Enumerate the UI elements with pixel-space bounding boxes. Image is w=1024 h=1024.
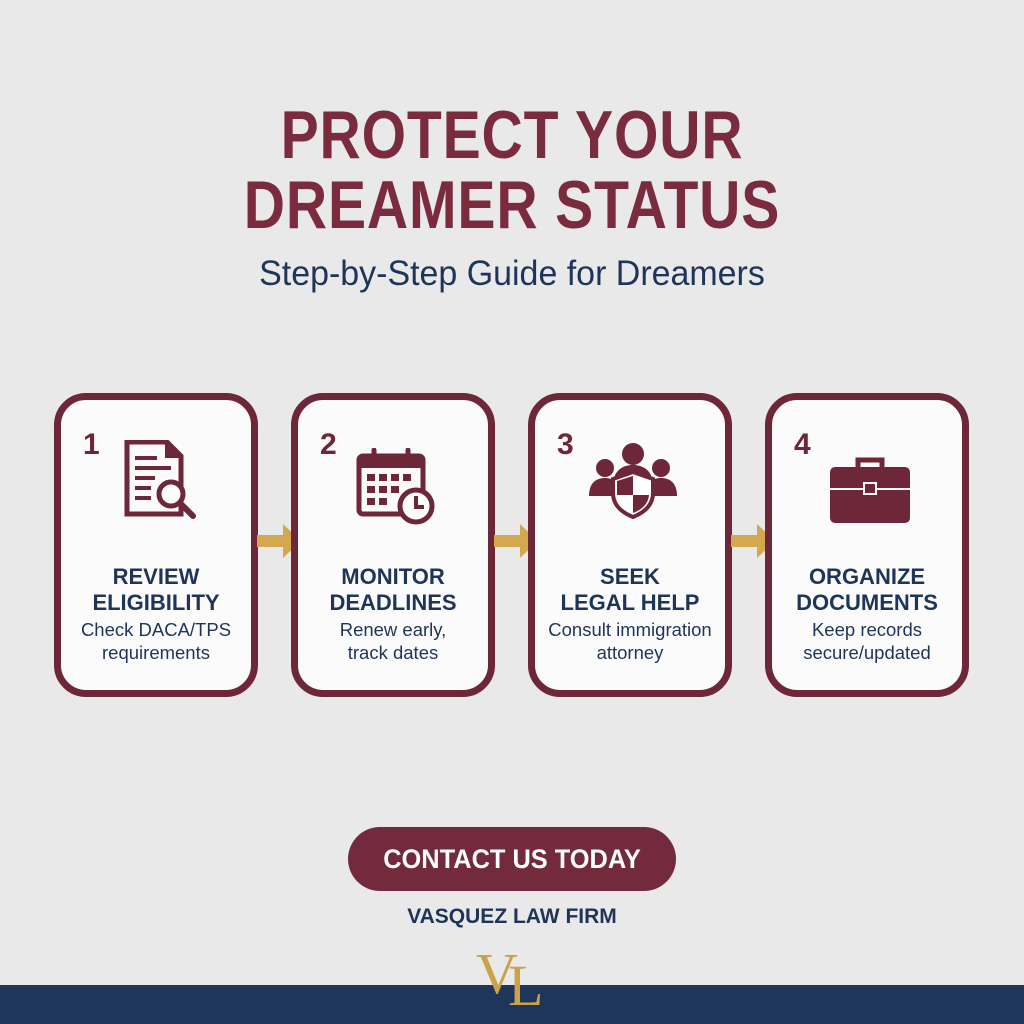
arrow 1 bbox=[257, 524, 291, 558]
step 4 heading: ORGANIZE bbox=[809, 564, 925, 589]
panel: step 1 bbox=[54, 393, 258, 697]
firm name: VASQUEZ LAW FIRM bbox=[407, 905, 617, 928]
step 4 heading bbox=[796, 564, 938, 615]
step 2 description: track dates bbox=[348, 642, 438, 663]
title: PROTECT YOUR bbox=[281, 97, 743, 173]
arrow 2 bbox=[494, 524, 528, 558]
step 3 heading bbox=[561, 564, 699, 615]
step number 2: 2 bbox=[320, 428, 337, 461]
step number 1: 1 bbox=[83, 428, 100, 461]
step 1 heading: REVIEW bbox=[113, 564, 199, 589]
step 2 heading: MONITOR bbox=[341, 564, 445, 589]
step 4 heading: DOCUMENTS bbox=[796, 590, 938, 615]
logo: VL: V bbox=[476, 941, 518, 1006]
logo: VL: L bbox=[508, 953, 543, 1018]
step 2 heading bbox=[329, 564, 457, 615]
footer bar bbox=[0, 985, 1024, 1024]
step 4 description bbox=[803, 619, 931, 663]
step 3 heading: SEEK bbox=[600, 564, 660, 589]
step 1 description: requirements bbox=[102, 642, 210, 663]
button: contact us: CONTACT US TODAY bbox=[383, 844, 641, 874]
panel: step 3 bbox=[528, 393, 732, 697]
title bbox=[244, 97, 780, 243]
step 3 heading: LEGAL HELP bbox=[561, 590, 699, 615]
step number 3: 3 bbox=[557, 428, 574, 461]
step 1 heading bbox=[92, 564, 220, 615]
step 1 heading: ELIGIBILITY bbox=[92, 590, 220, 615]
step 3 description: Consult immigration bbox=[548, 619, 712, 640]
logo: VL bbox=[476, 941, 543, 1018]
step 1 description bbox=[81, 619, 231, 663]
step 3 description: attorney bbox=[597, 642, 663, 663]
panel: step 4 bbox=[765, 393, 969, 697]
subtitle: Step-by-Step Guide for Dreamers bbox=[259, 254, 765, 293]
icon: document with magnifier bbox=[124, 440, 196, 519]
step number 4: 4 bbox=[794, 428, 811, 461]
panel: step 2 bbox=[291, 393, 495, 697]
step 2 description: Renew early, bbox=[340, 619, 446, 640]
icon: calendar clock bbox=[356, 448, 434, 524]
arrow 3 bbox=[731, 524, 765, 558]
step 3 description bbox=[548, 619, 712, 663]
step 2 description bbox=[340, 619, 446, 663]
icon: briefcase bbox=[830, 458, 910, 523]
step 1 description: Check DACA/TPS bbox=[81, 619, 231, 640]
step 2 heading: DEADLINES bbox=[329, 590, 457, 615]
title: DREAMER STATUS bbox=[244, 167, 780, 243]
step 4 description: Keep records bbox=[812, 619, 922, 640]
step 4 description: secure/updated bbox=[803, 642, 931, 663]
button: contact us bbox=[348, 827, 676, 891]
icon: people with shield bbox=[589, 443, 677, 520]
